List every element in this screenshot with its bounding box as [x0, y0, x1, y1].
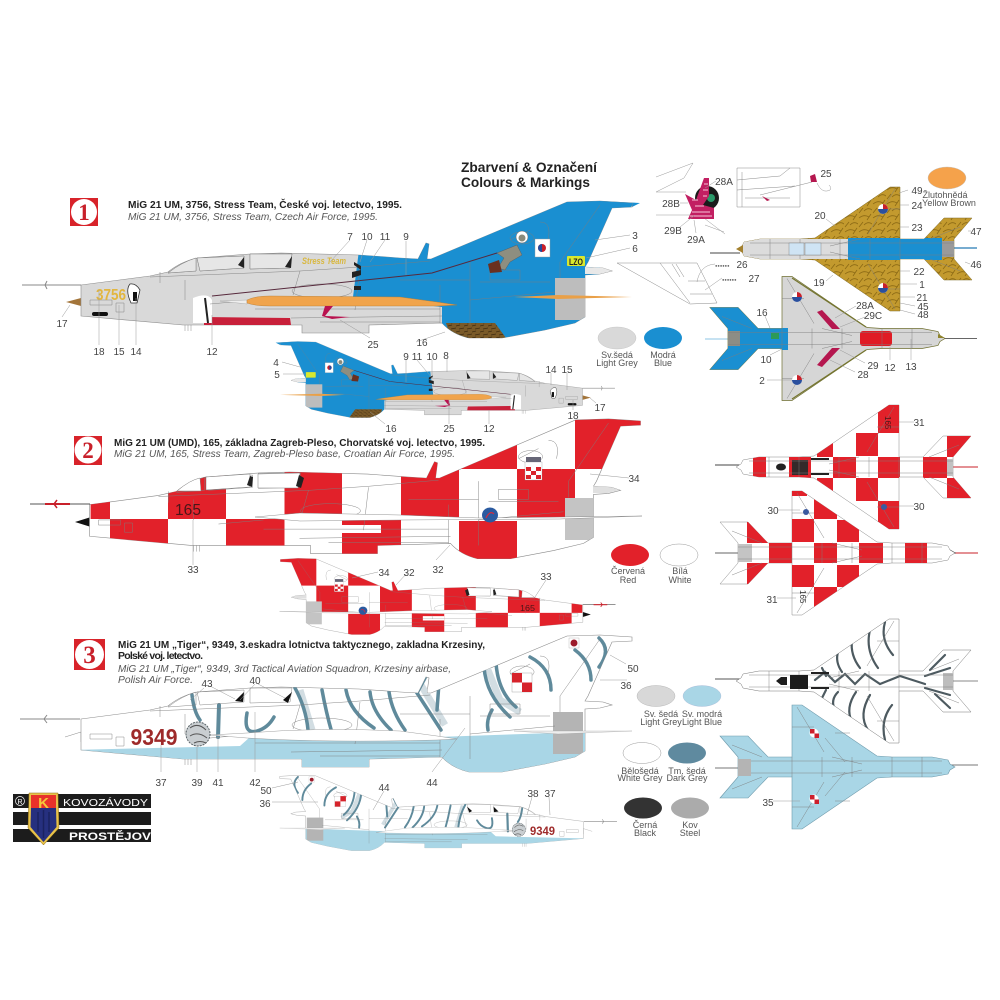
aircraft 2 top view, checks: 165	[883, 416, 892, 430]
aircraft 1 underside callouts: 10	[760, 355, 772, 366]
aircraft 1 side view callouts: 7	[347, 232, 353, 243]
badge: scheme 1	[70, 198, 98, 226]
aircraft 2 top view callouts	[899, 418, 925, 513]
detail: fin marking callouts: 28B	[662, 199, 680, 210]
swatch: blue: Blue	[654, 358, 672, 368]
aircraft 1 side view callouts: 25	[367, 340, 379, 351]
swatch: white: White	[668, 575, 692, 585]
aircraft 1 top view callouts: 23	[911, 223, 923, 234]
swatch: black	[624, 798, 662, 838]
aircraft 3 small view callouts: 44	[378, 783, 390, 794]
swatch: light blue: Light Blue	[682, 717, 722, 727]
aircraft 1 small view callouts: 8	[443, 351, 449, 362]
aircraft 1 underside callouts: 12	[884, 363, 896, 374]
aircraft 2 top view callouts: 30	[913, 502, 925, 513]
aircraft 1 side view callouts	[56, 231, 638, 358]
aircraft 3 small view callouts	[259, 782, 556, 815]
aircraft 1 underside view, grey wings and blue tail	[700, 276, 977, 400]
aircraft 1 small view callouts: 10	[426, 352, 438, 363]
aircraft 1 side view callouts: 17	[56, 319, 68, 330]
aircraft 1 painted markings: 3756	[96, 287, 126, 304]
detail: fin marking callouts: 28A	[715, 177, 733, 188]
aircraft 1 side view callouts: 14	[130, 347, 142, 358]
aircraft 2 small view callouts: 33	[540, 572, 552, 583]
aircraft 1 side view callouts: 18	[93, 347, 105, 358]
aircraft 3 side view callouts: 41	[212, 778, 224, 789]
aircraft 1 top view callouts	[813, 186, 982, 321]
detail: nose panel with marking 25	[737, 168, 832, 207]
aircraft 1 top view callouts: 1	[919, 280, 925, 291]
aircraft 1 top view callouts: 24	[911, 201, 923, 212]
logo: Kovozávody Prostějov: K	[38, 795, 49, 812]
aircraft 3 side view callouts: 42	[249, 778, 261, 789]
aircraft 2 underside view, checks	[715, 488, 978, 617]
swatch: blue	[644, 327, 682, 368]
detail: fin marking callouts: 29B	[664, 226, 682, 237]
aircraft 2 underside callouts: 30	[767, 506, 779, 517]
aircraft 2 small view callouts: 34	[378, 568, 390, 579]
aircraft 3 top view, tiger stripes	[715, 619, 978, 743]
badge: scheme 3	[74, 639, 105, 670]
heading: colours and markings: Zbarvení & Označení	[461, 160, 598, 175]
aircraft 1 underside callouts: 16	[756, 308, 768, 319]
aircraft 3 small mirrored side view	[280, 775, 617, 860]
aircraft 1 top view callouts: 19	[813, 278, 825, 289]
swatch: dark grey	[666, 742, 708, 783]
aircraft 3 small view callouts: 37	[544, 789, 556, 800]
aircraft 1 side view callouts: 10	[361, 232, 373, 243]
swatch: white grey	[617, 742, 663, 783]
aircraft 2 small view number: 165	[520, 604, 536, 613]
aircraft 1 small view callouts: 12	[483, 424, 495, 435]
aircraft 1 small view callouts: 5	[274, 370, 280, 381]
aircraft 3 underside view, light blue	[715, 705, 978, 829]
detail: fin marking callouts	[662, 177, 733, 246]
aircraft 3 side view callouts: 39	[191, 778, 203, 789]
scheme 2 caption: MiG 21 UM (UMD), 165, základna Zagreb-Pleso, Chorvatské voj. letectvo, 1995.	[114, 437, 485, 449]
aircraft 3 side view, tiger stripes	[20, 635, 632, 790]
aircraft 3 side view callouts: 36	[620, 681, 632, 692]
aircraft 1 underside callouts: 13	[905, 362, 917, 373]
badge: scheme 3: 3	[83, 642, 96, 669]
aircraft 1 side view callouts: 11	[380, 232, 391, 243]
badge: scheme 1: 1	[78, 200, 90, 225]
swatch: light blue: Sv. modrá	[682, 709, 722, 719]
aircraft 1 small view callouts: 11	[412, 352, 423, 363]
aircraft 1 top view callouts: 48	[917, 310, 929, 321]
aircraft 1 top view callouts: 46	[970, 260, 982, 271]
aircraft 1 small mirrored side view	[276, 338, 615, 421]
heading: colours and markings	[461, 160, 598, 190]
aircraft 2 small view callouts: 32	[403, 568, 415, 579]
aircraft 1 side view callouts: 12	[206, 347, 218, 358]
aircraft 1 top view callouts: 21	[916, 293, 928, 304]
aircraft 1 side view callouts: 6	[632, 244, 638, 255]
aircraft 1 side view callouts: 16	[416, 338, 428, 349]
scheme 2 caption	[114, 437, 485, 460]
aircraft 3 side view callouts: 37	[155, 778, 167, 789]
swatch: steel	[671, 798, 709, 838]
aircraft 1 small view callouts: 16	[385, 424, 397, 435]
aircraft 1 small view callouts: 9	[403, 352, 409, 363]
aircraft 3 small view number: 9349	[530, 824, 555, 838]
detail: fin marking with pink tiger	[656, 163, 725, 234]
aircraft 3 small view callouts: 50	[260, 786, 272, 797]
detail: nose panel with marking 25: 25	[820, 169, 832, 180]
aircraft 2 tactical number: 165	[175, 502, 201, 519]
logo: Kovozávody Prostějov: PROSTĚJOV	[69, 830, 152, 843]
detail: underwing stencil panel: ●●●●●●	[722, 277, 737, 282]
aircraft 1 small view callouts: 17	[594, 403, 606, 414]
aircraft 3 side view callouts: 40	[249, 676, 261, 687]
aircraft 1 top view callouts: 20	[814, 211, 826, 222]
aircraft 3 side view callouts: 43	[201, 679, 213, 690]
swatch: light grey: Sv. šedá	[644, 709, 678, 719]
swatch: yellow brown: Žlutohnědá	[922, 190, 968, 200]
detail: fin marking callouts: 29A	[687, 235, 705, 246]
aircraft 1 painted markings: LZO	[569, 257, 583, 267]
aircraft 1 underside callouts: 2	[759, 376, 765, 387]
swatch: yellow brown: Yellow Brown	[922, 198, 976, 208]
aircraft 1 small view callouts: 18	[567, 411, 579, 422]
scheme 3 caption: Polish Air Force.	[118, 674, 193, 686]
logo: Kovozávody Prostějov: KOVOZÁVODY	[63, 796, 148, 809]
aircraft 2 side view callouts	[187, 474, 640, 576]
aircraft 2 underside callouts: 31	[766, 595, 778, 606]
swatch: dark grey: Tm. šedá	[668, 766, 706, 776]
swatch: yellow brown	[922, 167, 976, 208]
swatch: black: Black	[634, 828, 656, 838]
logo: Kovozávody Prostějov: R	[17, 799, 23, 806]
aircraft 2 side view, red and white checks	[30, 410, 650, 571]
aircraft 3 underside callout	[762, 798, 800, 809]
aircraft 1 underside callouts: 28A	[856, 301, 874, 312]
aircraft 1 top view callouts: 49	[911, 186, 923, 197]
aircraft 2 top view callouts: 31	[913, 418, 925, 429]
swatch: red: Red	[620, 575, 636, 585]
swatch: white	[660, 544, 698, 585]
aircraft 1 side view callouts: 3	[632, 231, 638, 242]
aircraft 3 small view callouts: 38	[527, 789, 539, 800]
aircraft 1 small view callouts: 14	[545, 365, 557, 376]
aircraft 1 painted markings	[96, 256, 583, 304]
detail: underwing stencil panel: ●●●●●●	[715, 263, 730, 268]
swatch: blue: Modrá	[650, 350, 676, 360]
aircraft 1 side view callouts: 15	[113, 347, 125, 358]
aircraft 1 small view callouts: 15	[561, 365, 573, 376]
aircraft 3 small view callouts: 36	[259, 799, 271, 810]
scheme 1 caption: MiG 21 UM, 3756, Stress Team, Czech Air Force, 1995.	[128, 211, 378, 223]
aircraft 2 underside callouts	[766, 506, 800, 606]
aircraft 1 top view callouts: 47	[970, 227, 982, 238]
heading: colours and markings: Colours & Markings	[461, 175, 590, 190]
aircraft 3 side view callouts: 44	[426, 778, 438, 789]
scheme 1 caption: MiG 21 UM, 3756, Stress Team, České voj. letectvo, 1995.	[128, 198, 402, 211]
swatch: light grey: Light Grey	[640, 717, 682, 727]
aircraft 1 top view callouts: 45	[917, 302, 929, 313]
aircraft 2 small mirrored side view	[275, 553, 616, 641]
detail: underwing stencil panel: 27	[748, 274, 760, 285]
aircraft 1 small view callouts: 4	[273, 358, 279, 369]
scheme 3 caption: MiG 21 UM „Tiger“, 9349, 3rd Tactical Aviation Squadron, Krzesiny airbase,	[118, 663, 451, 675]
scheme 1 caption	[128, 198, 402, 223]
scheme 3 caption: Polské voj. letectvo.	[118, 650, 203, 662]
swatch: light grey	[637, 686, 682, 727]
aircraft 1 side view callouts: 9	[403, 232, 409, 243]
detail: underwing stencil panel: 26	[736, 260, 748, 271]
swatch: white: Bílá	[672, 566, 688, 576]
aircraft 1 underside callouts: 29	[867, 361, 879, 372]
swatch: light blue	[682, 686, 722, 727]
aircraft 1 underside callouts: 28	[857, 370, 869, 381]
aircraft 3 tactical number: 9349	[130, 724, 178, 750]
swatch: black: Černá	[633, 820, 657, 830]
aircraft 1 top view callouts: 22	[913, 267, 925, 278]
aircraft 2 side view callouts: 34	[628, 474, 640, 485]
swatch: white grey: White Grey	[617, 773, 663, 783]
aircraft 1 underside callouts: 29C	[864, 311, 882, 322]
scheme 3 caption: MiG 21 UM „Tiger“, 9349, 3.eskadra lotnictva taktycznego, zakladna Krzesiny,	[118, 639, 485, 651]
aircraft 2 underside view, checks: 165	[798, 590, 807, 604]
aircraft 1 small view callouts: 25	[443, 424, 455, 435]
aircraft 1 side view, blue and grey	[22, 195, 640, 345]
aircraft 1 small view callouts	[273, 351, 606, 435]
swatch: red	[611, 544, 649, 585]
swatch: light grey: Light Grey	[596, 358, 638, 368]
aircraft 2 small view callouts	[352, 568, 552, 597]
badge: scheme 2	[74, 436, 102, 465]
aircraft 3 side view callouts	[155, 655, 639, 789]
detail: underwing stencil panel	[617, 260, 760, 304]
logo: Kovozávody Prostějov	[13, 793, 152, 845]
scheme 3 caption	[118, 639, 485, 686]
swatch: light grey	[596, 327, 638, 368]
swatch: steel: Steel	[680, 828, 700, 838]
badge: scheme 2: 2	[82, 438, 94, 463]
aircraft 3 underside callout: 35	[762, 798, 774, 809]
aircraft 3 side view callouts: 50	[627, 664, 639, 675]
swatch: light grey: Sv.šedá	[601, 350, 633, 360]
aircraft 1 underside callouts	[756, 301, 917, 387]
aircraft 1 painted markings: Stress Team	[302, 256, 346, 266]
swatch: red: Červená	[611, 566, 645, 576]
aircraft 1 top view, yellow brown wings	[710, 187, 977, 311]
swatch: dark grey: Dark Grey	[666, 773, 708, 783]
aircraft 2 side view callouts: 32	[432, 565, 444, 576]
scheme 2 caption: MiG 21 UM, 165, Stress Team, Zagreb-Pleso base, Croatian Air Force, 1995.	[114, 448, 455, 460]
swatch: steel: Kov	[682, 820, 698, 830]
aircraft 2 side view callouts: 33	[187, 565, 199, 576]
swatch: white grey: Bělošedá	[621, 766, 659, 776]
aircraft 2 top view, checks	[715, 405, 978, 529]
